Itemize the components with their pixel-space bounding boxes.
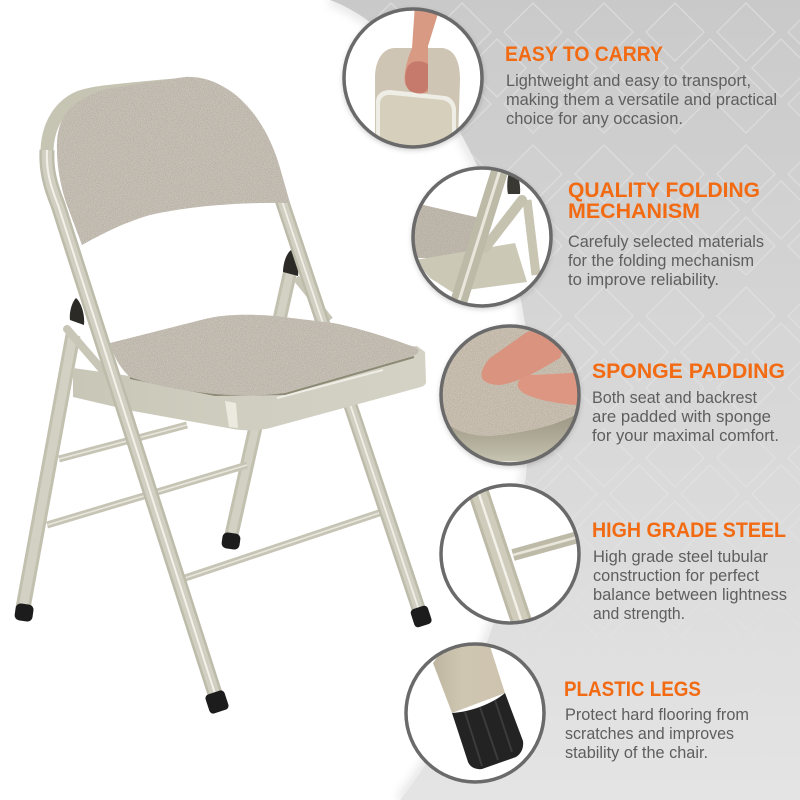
- text block: Lightweight and easy to transport,: [506, 72, 751, 90]
- text block: Both seat and backrest: [592, 389, 757, 407]
- seat pan: [73, 346, 426, 430]
- text block: [568, 233, 764, 289]
- black feet: [14, 532, 433, 715]
- seat cushion: [110, 315, 418, 395]
- icon: plastic foot photo circle: [405, 640, 545, 783]
- heading: EASY TO CARRY: [505, 43, 663, 66]
- background: grey patterned panel: [330, 0, 800, 800]
- text block: are padded with sponge: [592, 408, 771, 426]
- feature: quality folding mechanism: [410, 165, 764, 309]
- text block: for your maximal comfort.: [592, 427, 779, 445]
- feature: high grade steel: [440, 484, 787, 626]
- backrest frame: [47, 84, 185, 205]
- folding arm: [67, 329, 105, 373]
- text block: making them a versatile and practical: [506, 91, 777, 109]
- heading: MECHANISM: [568, 200, 700, 223]
- feature: sponge padding: [435, 325, 785, 470]
- text block: construction for perfect: [593, 567, 759, 585]
- text block: Carefuly selected materials: [568, 233, 764, 251]
- rear right leg: [231, 250, 330, 537]
- heading: QUALITY FOLDING: [568, 179, 760, 202]
- heading: PLASTIC LEGS: [564, 678, 701, 701]
- cross bars: [47, 425, 382, 578]
- text block: scratches and improves: [565, 725, 734, 743]
- text block: stability of the chair.: [565, 744, 708, 762]
- text block: balance between lightness: [593, 586, 787, 604]
- icon: carrying photo circle: [343, 4, 483, 150]
- text block: and strength.: [593, 605, 685, 623]
- icon: folding mechanism photo circle: [410, 165, 552, 309]
- backrest cushion: [57, 77, 290, 245]
- heading: HIGH GRADE STEEL: [592, 519, 786, 542]
- text block: [565, 706, 749, 762]
- feature: easy to carry: [343, 4, 777, 150]
- text block: choice for any occasion.: [506, 110, 683, 128]
- right frame tube and leg: [281, 198, 420, 613]
- icon: padding photo circle: [435, 325, 590, 470]
- chair illustration: [14, 77, 433, 715]
- text block: for the folding mechanism: [568, 252, 754, 270]
- icon: steel tube photo circle: [440, 484, 580, 626]
- text block: [506, 72, 777, 128]
- feature: plastic legs: [405, 640, 749, 783]
- rear left leg: [23, 298, 84, 608]
- text block: to improve reliability.: [568, 271, 719, 289]
- text block: [592, 389, 779, 445]
- heading: SPONGE PADDING: [592, 360, 785, 383]
- text block: High grade steel tubular: [593, 548, 768, 566]
- text block: [593, 548, 787, 623]
- text block: Protect hard flooring from: [565, 706, 749, 724]
- heading: [568, 179, 760, 223]
- main front tube and leg: [47, 150, 217, 700]
